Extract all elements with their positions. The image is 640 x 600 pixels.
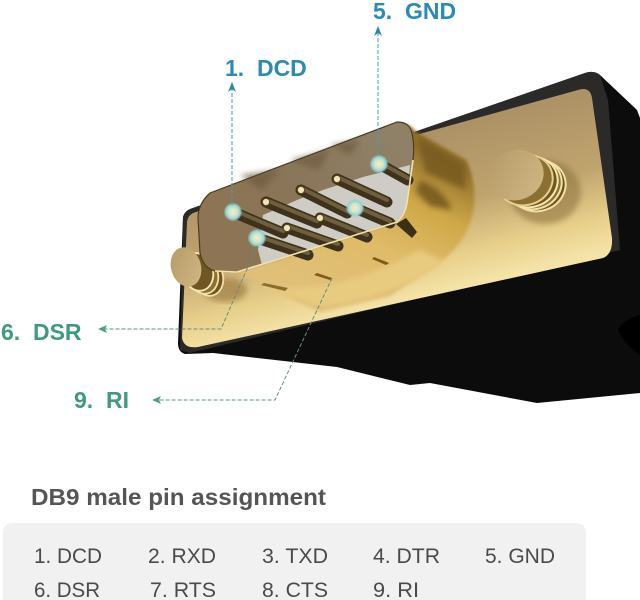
leader line: pin 9 RI: [152, 278, 332, 404]
highlighted pin glows: [224, 154, 388, 248]
connector illustration: [166, 72, 640, 403]
pin list row 1: [34, 545, 555, 568]
panel background: [3, 523, 586, 600]
light back wall: [258, 165, 410, 265]
leader line: pin 6 DSR: [98, 246, 257, 333]
left screw: [166, 244, 247, 302]
label: 6. DSR: 6. DSR: [1, 319, 82, 345]
pin list row 1: 5. GND: [485, 545, 555, 568]
bottom-right housing notch: [618, 315, 640, 355]
right screw: [481, 142, 581, 224]
panel: pin assignment list: [3, 523, 586, 600]
pin list row 1: 4. DTR: [373, 545, 440, 568]
pin tips: [262, 175, 341, 232]
pin list row 1: 2. RXD: [148, 545, 216, 568]
mounting slots: [261, 257, 389, 291]
label: 9. RI: 9. RI: [74, 387, 129, 413]
connector front face: [198, 122, 414, 272]
pin list row 1: 1. DCD: [34, 545, 102, 568]
pin list row 1: 3. TXD: [262, 545, 328, 568]
face rim: [198, 122, 414, 272]
black connector housing: [178, 72, 640, 403]
label: 1. DCD: 1. DCD: [225, 55, 307, 81]
leader line: pin 1 DCD: [228, 82, 236, 205]
face shadow blotches: [240, 140, 360, 190]
metal shell side: [237, 124, 474, 312]
pins: [233, 162, 408, 255]
heading: DB9 male pin assignment: [31, 484, 326, 510]
leader line: pin 5 GND: [374, 26, 382, 156]
pin list row 2: [34, 579, 419, 600]
gold back plate: [182, 89, 612, 347]
